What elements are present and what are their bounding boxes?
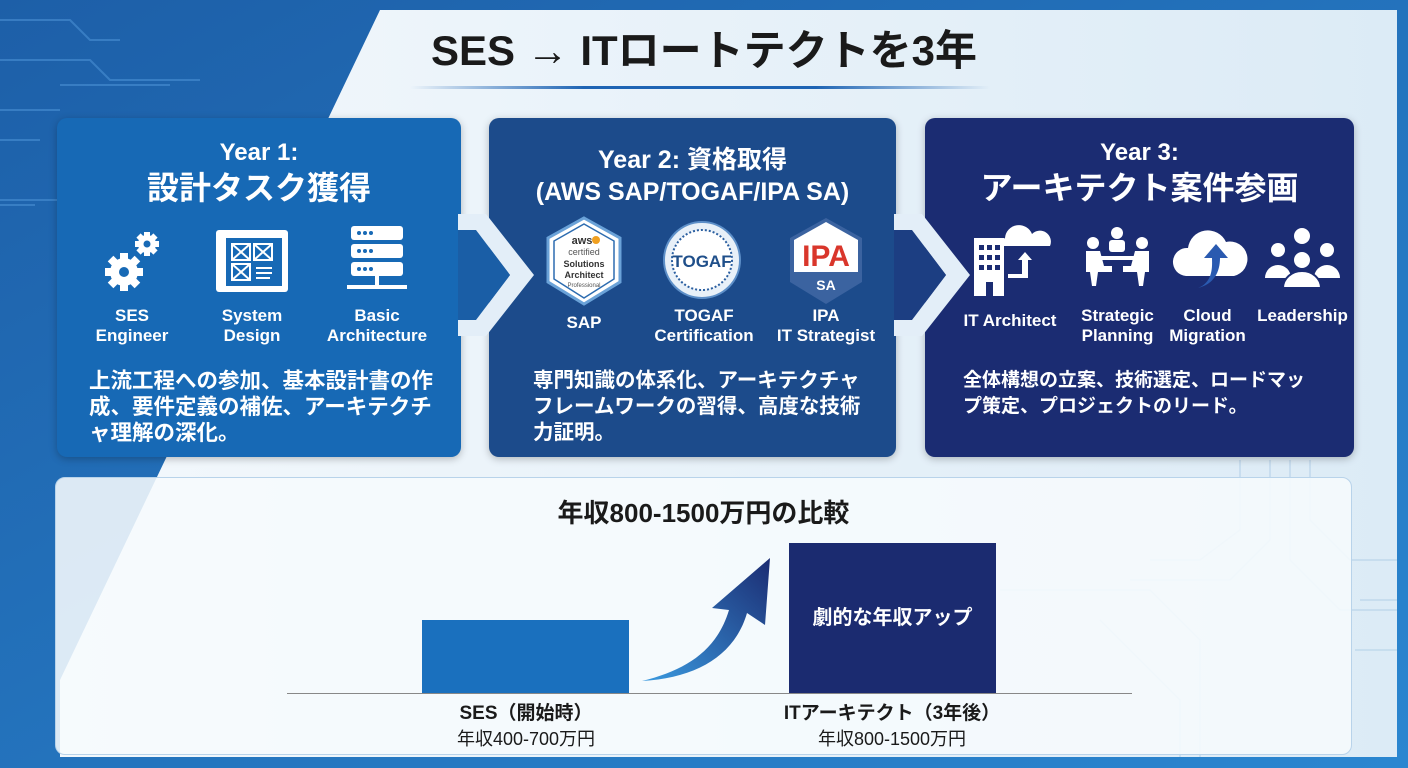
icon: AWS badge: Architect — [564, 270, 604, 280]
heading year 3 — [980, 139, 1299, 206]
label: TOGAF Certification — [654, 306, 754, 345]
label: System Design — [222, 306, 282, 345]
icon: leadership — [1265, 228, 1340, 287]
description year 2: 専門知識の体系化、アーキテクチャフレームワークの習得、高度な技術力証明。 — [533, 369, 860, 444]
icon: gears — [105, 232, 159, 291]
label: Cloud Migration: Migration — [1169, 326, 1246, 345]
icon: AWS badge — [546, 216, 622, 306]
bar chart — [287, 543, 1132, 694]
label: Basic Architecture — [327, 306, 427, 345]
icon: building cloud — [974, 225, 1051, 296]
icon: AWS badge: Solutions — [564, 259, 604, 269]
label: IPA IT Strategist: IT Strategist — [777, 326, 875, 345]
label: SES Engineer: Engineer — [96, 326, 168, 345]
bar: IT architect: 劇的な年収アップ — [812, 607, 972, 629]
icon: IPA badge: IPA — [802, 240, 850, 273]
panel: year 1 — [57, 118, 461, 457]
icon: AWS badge: aws — [572, 235, 592, 247]
label: IT architect after 3 years — [784, 702, 1000, 749]
label: TOGAF Certification: Certification — [654, 326, 754, 345]
baseline — [287, 693, 1132, 694]
label: SAP: SAP — [567, 313, 601, 332]
heading year 1 — [147, 139, 371, 206]
heading year 2: (AWS SAP/TOGAF/IPA SA) — [536, 178, 849, 206]
arrow: growth — [642, 558, 770, 681]
label: Strategic Planning: Planning — [1082, 326, 1153, 345]
heading year 2: Year 2: 資格取得 — [598, 146, 787, 174]
icon: blueprint — [216, 230, 288, 292]
icon: IPA badge — [790, 218, 862, 304]
label: SES Engineer — [96, 306, 168, 345]
icon: meeting — [1086, 227, 1149, 286]
label: System Design: Design — [224, 326, 280, 345]
description year 1: 上流工程への参加、基本設計書の作成、要件定義の補佐、アーキテクチャ理解の深化。 — [89, 369, 433, 445]
label: SES start — [457, 702, 595, 749]
label: System Design: System — [222, 306, 282, 325]
heading year 1: Year 1: — [220, 139, 298, 166]
label: SES Engineer: SES — [115, 306, 149, 325]
icon: AWS badge: Professional — [567, 283, 601, 289]
arrow: year2 to year3 — [894, 214, 970, 336]
label: Basic Architecture: Architecture — [327, 326, 427, 345]
icon: IPA badge: SA — [816, 277, 836, 293]
title underline — [410, 86, 990, 89]
label: SES start: 年収400-700万円 — [457, 729, 595, 749]
arrow: year1 to year2 — [458, 214, 534, 336]
label: Strategic Planning — [1081, 306, 1154, 345]
icon: server — [347, 226, 407, 289]
icon: AWS badge: certified — [568, 247, 600, 257]
panel: year 2 — [489, 118, 896, 457]
bar: SES — [422, 620, 629, 693]
label: IPA IT Strategist — [777, 306, 875, 345]
description year 3: 全体構想の立案、技術選定、ロードマップ策定、プロジェクトのリード。 — [963, 370, 1305, 417]
icon: TOGAF badge — [663, 221, 741, 299]
heading year 2 — [536, 146, 849, 206]
bar: IT architect — [789, 543, 996, 693]
label: Cloud Migration — [1169, 306, 1246, 345]
label: Strategic Planning: Strategic — [1081, 306, 1154, 325]
heading year 1: 設計タスク獲得 — [147, 170, 371, 206]
label: Basic Architecture: Basic — [354, 306, 400, 325]
label: IT Architect: IT Architect — [964, 311, 1056, 330]
heading year 3: Year 3: — [1100, 139, 1179, 166]
icon: TOGAF badge: TOGAF — [672, 252, 732, 271]
label: Cloud Migration: Cloud — [1183, 306, 1232, 325]
title: SES → ITロートテクトを3年 — [431, 27, 977, 74]
label: TOGAF Certification: TOGAF — [674, 306, 734, 325]
heading: comparison: 年収800-1500万円の比較 — [558, 498, 849, 528]
icon: cloud migration — [1172, 230, 1248, 288]
panel: salary comparison — [55, 477, 1352, 755]
label: Leadership: Leadership — [1257, 306, 1348, 325]
panel: year 3 — [925, 118, 1354, 457]
label: IT architect after 3 years: 年収800-1500万円 — [818, 729, 966, 749]
heading year 3: アーキテクト案件参画 — [980, 170, 1299, 206]
label: IT architect after 3 years: ITアーキテクト（3年後） — [784, 703, 1000, 724]
label: SES start: SES（開始時） — [459, 703, 593, 724]
label: IPA IT Strategist: IPA — [812, 306, 840, 325]
